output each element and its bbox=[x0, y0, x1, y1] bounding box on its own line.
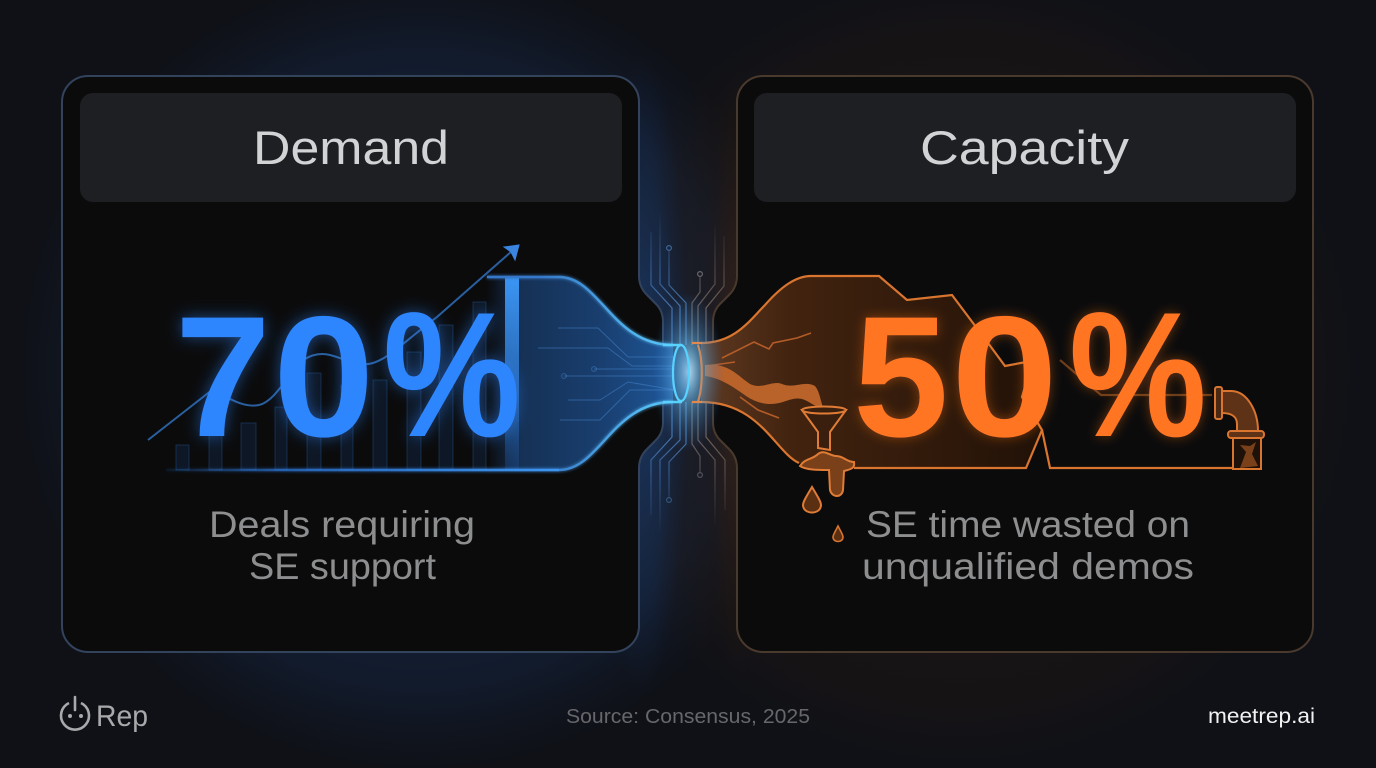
right bottle bbox=[701, 276, 1264, 542]
left bottle bbox=[148, 245, 675, 470]
stat: 50%: 5 bbox=[853, 281, 949, 473]
heading box: capacity bbox=[754, 93, 1296, 202]
leaking stream bbox=[705, 365, 824, 410]
icon: funnel bbox=[802, 406, 846, 450]
website: meetrep.ai bbox=[1208, 705, 1315, 728]
logo: Rep bbox=[61, 697, 148, 733]
stat: 70% bbox=[175, 276, 521, 474]
caption: demand: Deals requiring bbox=[209, 504, 475, 545]
caption: capacity: SE time wasted on bbox=[866, 504, 1190, 545]
icon: small drop bbox=[833, 526, 843, 542]
source note: Source: Consensus, 2025 bbox=[566, 706, 810, 728]
bottle body: orange bbox=[701, 276, 1042, 468]
bottle outline: broken bbox=[701, 276, 1260, 468]
bottle body: blue bbox=[487, 277, 673, 470]
icon: large drop bbox=[803, 487, 821, 512]
bar chart bbox=[176, 302, 486, 470]
stat: 70%: 7 bbox=[175, 281, 271, 473]
bright bar bbox=[505, 277, 519, 470]
panel: demand bbox=[62, 76, 663, 652]
caption: capacity bbox=[862, 504, 1194, 587]
cracks bbox=[706, 333, 811, 418]
caption: demand bbox=[209, 504, 475, 587]
neck connector glow bbox=[652, 292, 724, 452]
stat: 50%: % bbox=[1069, 276, 1207, 474]
trend line with arrow bbox=[148, 245, 519, 440]
icon: power plug bbox=[61, 697, 89, 730]
heading box: capacity: Capacity bbox=[920, 121, 1130, 174]
stat: 70%: % bbox=[383, 276, 521, 474]
logo: Rep: Rep bbox=[96, 700, 148, 733]
circuit traces between panels bbox=[651, 210, 725, 535]
neck ring: blue bbox=[673, 345, 689, 401]
neck ring: orange bbox=[698, 345, 702, 402]
caption: capacity: unqualified demos bbox=[862, 546, 1194, 587]
icon: puddle with drip bbox=[800, 452, 854, 496]
icon: rusty pipe bbox=[1215, 387, 1264, 469]
bottle outline: blue bbox=[166, 277, 673, 470]
caption: demand: SE support bbox=[249, 546, 437, 587]
heading box: demand: Demand bbox=[253, 121, 449, 174]
stat: 70%: 0 bbox=[273, 281, 374, 473]
heading box: demand bbox=[80, 93, 622, 202]
panel: capacity bbox=[713, 76, 1313, 652]
stat: 50% bbox=[853, 276, 1207, 474]
circuit lines in bottle bbox=[538, 328, 675, 420]
stat: 50%: 0 bbox=[951, 281, 1058, 473]
